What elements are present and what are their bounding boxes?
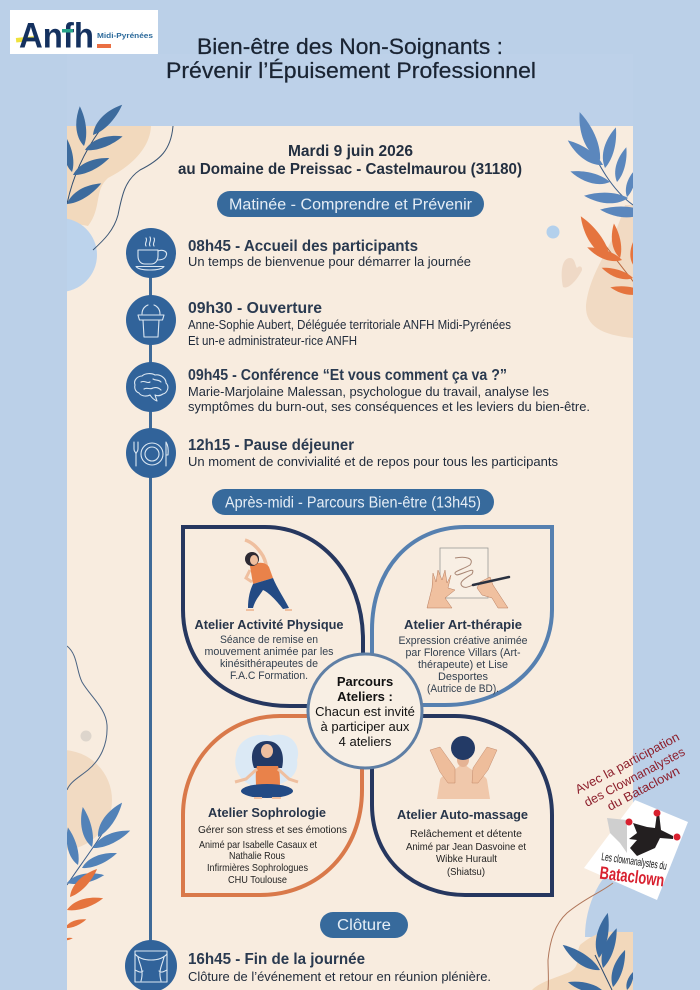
decoration: bottom-right blobs, curve and leaves xyxy=(532,877,633,990)
timeline line xyxy=(149,254,152,966)
section pill: après-midi xyxy=(212,489,494,515)
date and location xyxy=(178,143,522,178)
description: kinésithérapeutes de xyxy=(220,658,318,670)
description: Infirmières Sophrologues xyxy=(207,862,308,874)
description: Animé par Isabelle Casaux et xyxy=(199,839,317,851)
item: 08h45: 08h45 - Accueil des participants xyxy=(188,238,418,255)
callout: parcours ateliers: à participer aux xyxy=(321,719,410,734)
description xyxy=(406,828,526,878)
item: 16h45 xyxy=(188,951,491,984)
participation note: du Bataclown xyxy=(605,764,682,814)
description: (Autrice de BD). xyxy=(427,683,499,695)
item: 09h45: Marie-Marjolaine Malessan, psychologue du travail, analyse les xyxy=(188,385,549,399)
participation note: des Clownanalystes xyxy=(582,745,687,810)
description xyxy=(204,634,334,682)
description: Nathalie Rous xyxy=(229,850,285,862)
item: 09h45 xyxy=(188,367,590,414)
icon: shoulder massage xyxy=(430,736,497,799)
section pill: matinée xyxy=(217,191,484,217)
item: 16h45: Clôture de l’événement et retour en réunion plénière. xyxy=(188,970,491,984)
description xyxy=(398,635,528,695)
cream panel xyxy=(67,54,633,990)
logo: les clownanalystes du bataclown xyxy=(584,800,688,900)
icon: brain xyxy=(126,362,176,412)
panel: atelier sophrologie xyxy=(183,716,362,895)
description: par Florence Villars (Art- xyxy=(406,647,521,659)
item: 09h30 xyxy=(188,300,511,348)
icon: podium xyxy=(126,295,176,345)
logo: ANFH Midi-Pyrénées xyxy=(10,10,158,56)
callout: parcours ateliers xyxy=(308,654,422,768)
description: F.A.C Formation. xyxy=(230,670,308,682)
callout: parcours ateliers: Parcours xyxy=(337,674,393,689)
callout: parcours ateliers: 4 ateliers xyxy=(339,734,392,749)
item: 09h45: 09h45 - Conférence “Et vous comment ça va ?” xyxy=(188,367,507,384)
section pill: clôture: Clôture xyxy=(337,917,391,934)
icon: stretching figure xyxy=(245,540,292,610)
date and location: Mardi 9 juin 2026 xyxy=(288,143,413,160)
callout: parcours ateliers: Chacun est invité xyxy=(315,704,415,719)
heading: Atelier Auto-massage xyxy=(397,807,528,822)
callout: parcours ateliers: Ateliers : xyxy=(337,689,393,704)
logo: ANFH Midi-Pyrénées: Midi-Pyrénées xyxy=(97,31,153,40)
item: 08h45: Un temps de bienvenue pour démarrer la journée xyxy=(188,255,471,269)
logo: les clownanalystes du bataclown: Bataclown xyxy=(599,863,665,890)
icon: plate and cutlery xyxy=(126,428,176,478)
title xyxy=(166,34,536,83)
description: mouvement animée par les xyxy=(204,646,334,658)
icon: drawing hands xyxy=(427,548,509,608)
description: Relâchement et détente xyxy=(410,828,522,840)
description: Animé par Jean Dasvoine et xyxy=(406,841,526,853)
description: Séance de remise en xyxy=(220,634,318,646)
item: 12h15: Un moment de convivialité et de repos pour tous les participants xyxy=(188,455,558,469)
participation note: Avec la participation xyxy=(573,730,682,797)
heading: Atelier Activité Physique xyxy=(194,617,344,632)
panel: atelier auto-massage xyxy=(372,716,552,895)
item: 12h15 xyxy=(188,437,558,469)
icon: coffee cup xyxy=(126,228,176,278)
description: Gérer son stress et ses émotions xyxy=(198,824,347,836)
item: 16h45: 16h45 - Fin de la journée xyxy=(188,951,365,968)
description: CHU Toulouse xyxy=(228,874,287,886)
description: (Shiatsu) xyxy=(447,866,485,878)
decoration: left-middle curve and leaves xyxy=(67,646,130,940)
icon: theatre curtain xyxy=(125,940,177,990)
logo: ANFH Midi-Pyrénées: Anfh xyxy=(19,16,94,56)
item: 08h45 xyxy=(188,238,471,269)
title: Bien-être des Non-Soignants : xyxy=(197,34,503,59)
description: Wibke Hurault xyxy=(436,853,497,865)
item: 09h30: Et un-e administrateur-rice ANFH xyxy=(188,334,357,348)
section pill: matinée: Matinée - Comprendre et Prévenir xyxy=(229,196,472,214)
item: 09h30: Anne-Sophie Aubert, Déléguée territoriale ANFH Midi-Pyrénées xyxy=(188,318,511,332)
item: 09h45: symptômes du burn-out, ses conséquences et les leviers du bien-être. xyxy=(188,400,590,414)
heading: Atelier Art-thérapie xyxy=(404,617,522,632)
panel: atelier art-thérapie xyxy=(372,527,552,705)
description: Desportes xyxy=(438,671,488,683)
panel: atelier activité physique xyxy=(183,527,363,706)
decoration: top-right blob and leaves xyxy=(546,112,633,338)
heading: Atelier Sophrologie xyxy=(208,805,326,820)
item: 12h15: 12h15 - Pause déjeuner xyxy=(188,437,354,454)
decoration: top-left blobs and leaves xyxy=(67,104,174,292)
section pill: clôture xyxy=(320,912,408,938)
date and location: au Domaine de Preissac - Castelmaurou (31180) xyxy=(178,161,522,178)
title: Prévenir l’Épuisement Professionnel xyxy=(166,58,536,83)
description xyxy=(198,824,347,886)
section pill: après-midi: Après-midi - Parcours Bien-être (13h45) xyxy=(225,494,481,512)
description: thérapeute) et Lise xyxy=(418,659,508,671)
item: 09h30: 09h30 - Ouverture xyxy=(188,300,322,317)
description: Expression créative animée xyxy=(398,635,528,647)
icon: meditating figure xyxy=(235,735,298,798)
